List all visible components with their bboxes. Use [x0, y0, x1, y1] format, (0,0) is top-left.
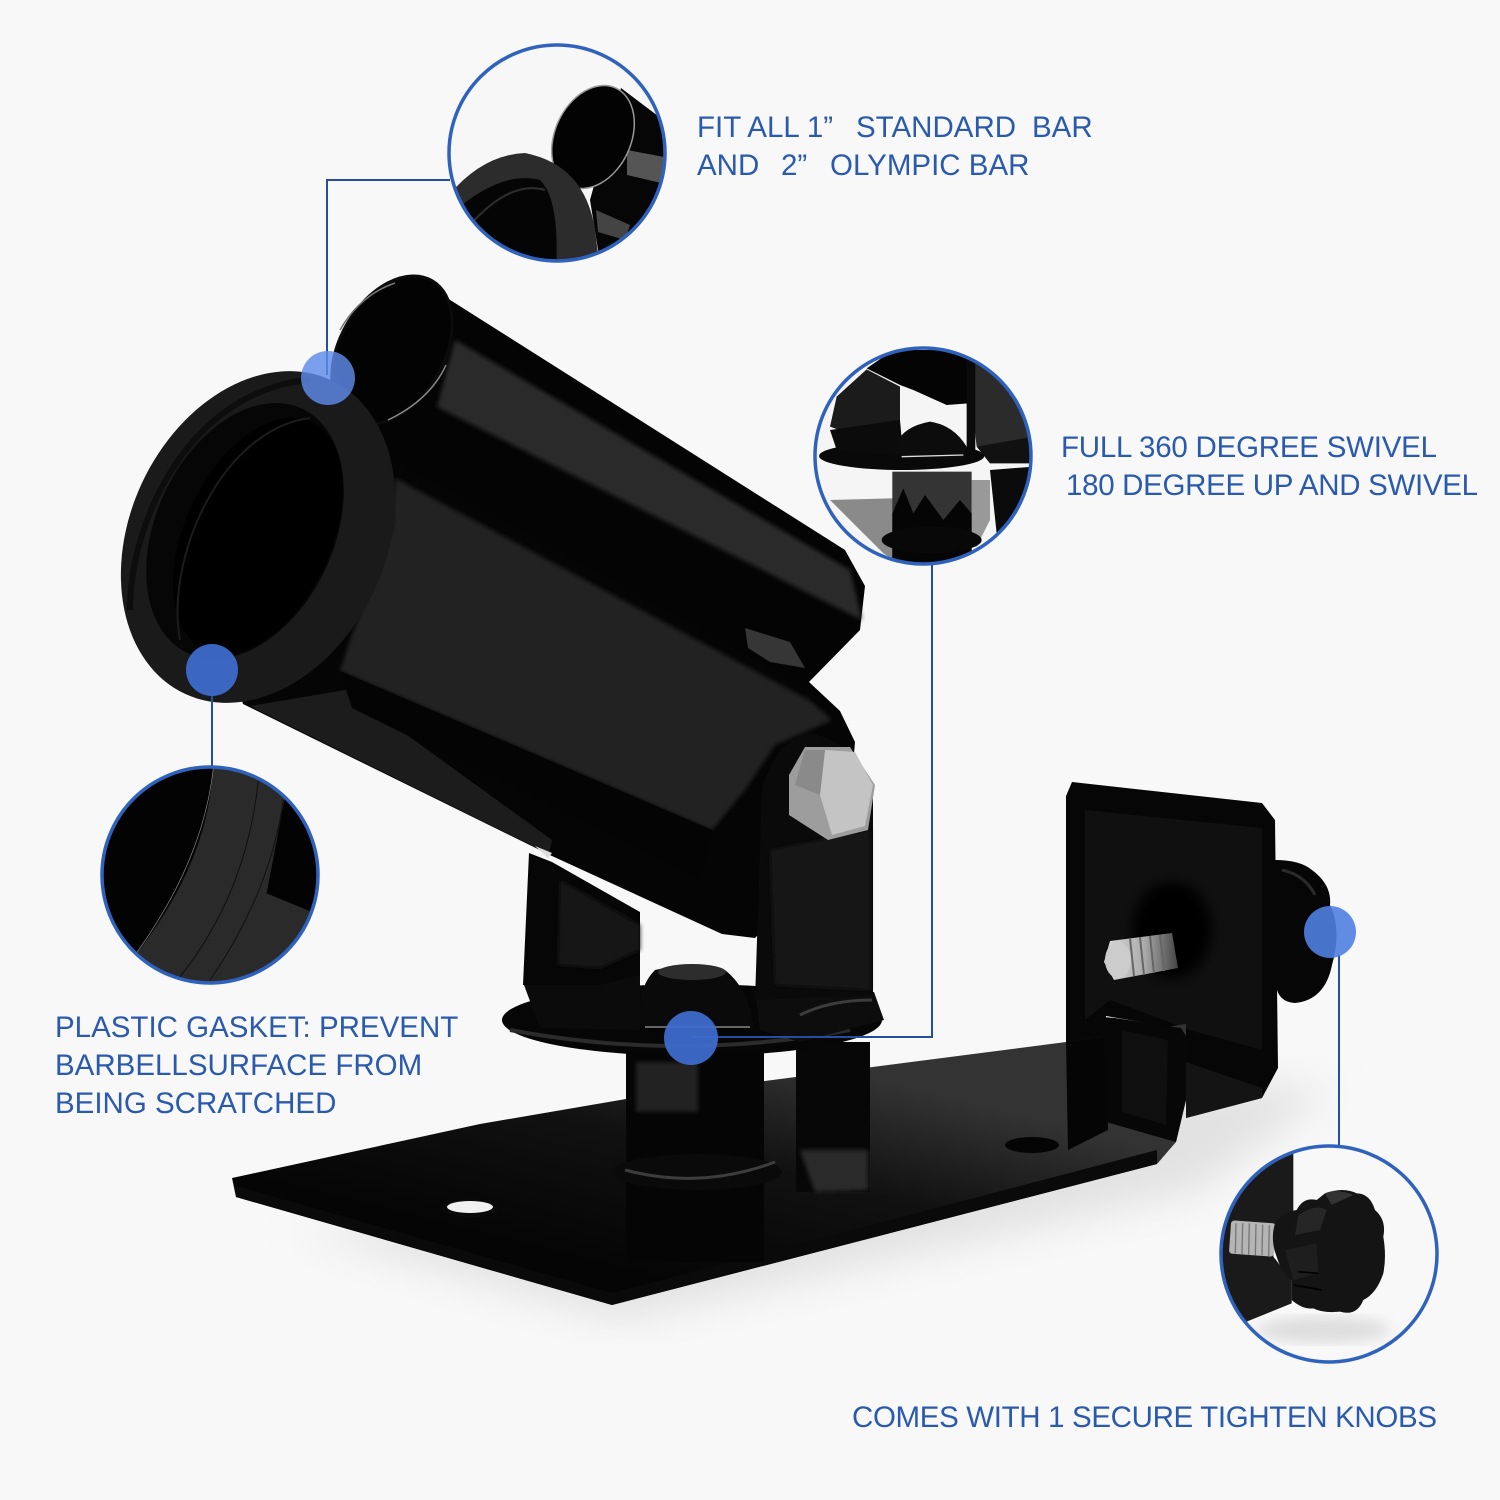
marker: gasket — [186, 644, 238, 696]
detail circle: swivel — [815, 348, 1033, 570]
hex bolt — [789, 747, 875, 840]
detail circle: knob — [1210, 1146, 1437, 1362]
label: bar fit: BAR — [1032, 111, 1093, 144]
detail circle: tube openings — [440, 45, 670, 270]
threaded bolt — [1104, 933, 1178, 980]
label: bar fit: STANDARD — [856, 111, 1016, 144]
floor shadow — [300, 1080, 1330, 1320]
gasket ring — [69, 326, 447, 748]
plate side tab — [1103, 1017, 1186, 1142]
main swivel post — [612, 1050, 782, 1262]
rear tube — [307, 255, 865, 711]
swivel disc and nut — [502, 950, 884, 1056]
rear post reflection — [796, 1042, 870, 1192]
front tube — [69, 326, 855, 938]
connector lines — [212, 180, 1339, 1150]
marker: knob — [1304, 906, 1356, 958]
tightening knob — [1275, 860, 1337, 1003]
label: swivel: 180 DEGREE UP AND SWIVEL — [1066, 469, 1478, 502]
marker: rear tube — [301, 351, 355, 405]
rear support leg — [523, 853, 640, 985]
base plate — [232, 1024, 1186, 1305]
label: gasket: BARBELLSURFACE FROM — [55, 1049, 422, 1082]
label: bar fit: FIT ALL 1” — [697, 111, 833, 144]
label: knob: COMES WITH 1 SECURE TIGHTEN KNOBS — [852, 1401, 1437, 1434]
label: bar fit: OLYMPIC BAR — [830, 149, 1029, 182]
label: gasket: PLASTIC GASKET: PREVENT — [55, 1011, 458, 1044]
product: T-bar landmine attachment — [69, 255, 1337, 1305]
label: gasket: BEING SCRATCHED — [55, 1087, 336, 1120]
label: bar fit: 2” — [781, 149, 807, 182]
label: swivel: FULL 360 DEGREE SWIVEL — [1061, 431, 1437, 464]
front support leg — [755, 733, 873, 1000]
detail circle: gasket — [102, 763, 323, 993]
label: bar fit: AND — [697, 149, 759, 182]
marker: swivel — [664, 1011, 718, 1065]
rear bracket plate — [1066, 782, 1278, 1118]
